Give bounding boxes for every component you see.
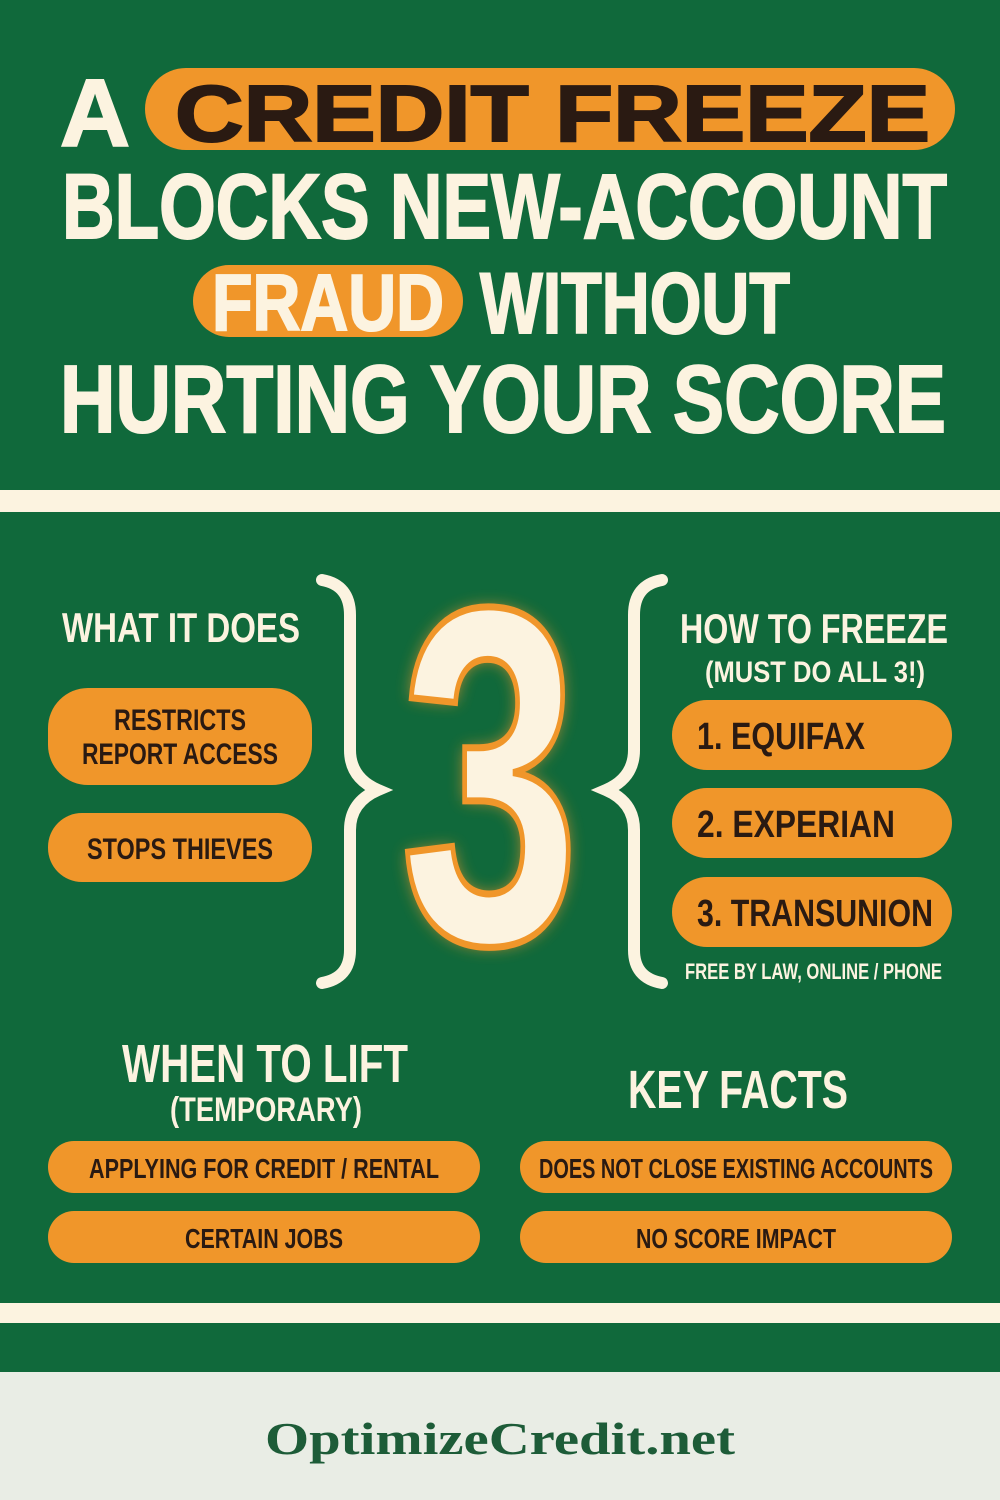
- panel: how to freeze: [672, 605, 952, 984]
- panel: when to lift: APPLYING FOR CREDIT / RENTAL: [89, 1153, 439, 1184]
- panel: how to freeze: (MUST DO ALL 3!): [705, 656, 925, 689]
- panel: what it does: [48, 604, 312, 882]
- panel: key facts: NO SCORE IMPACT: [636, 1223, 836, 1254]
- panel: when to lift: [48, 1034, 480, 1263]
- big number 3: 3: [400, 507, 580, 1044]
- title: WITHOUT: [480, 256, 790, 352]
- panel: when to lift: (TEMPORARY): [170, 1091, 362, 1129]
- brace right: [322, 580, 378, 983]
- panel: how to freeze: 3. TRANSUNION: [697, 893, 933, 935]
- title pill: fraud: [193, 265, 463, 337]
- panel: when to lift: CERTAIN JOBS: [185, 1223, 343, 1254]
- big number 3: 3: [400, 507, 580, 1044]
- panel: key facts: [520, 1060, 952, 1263]
- panel: what it does: REPORT ACCESS: [82, 738, 278, 771]
- panel: key facts: KEY FACTS: [628, 1060, 848, 1120]
- title: [60, 60, 955, 453]
- panel: how to freeze: 1. EQUIFAX: [697, 716, 866, 758]
- panel: what it does: STOPS THIEVES: [87, 833, 273, 866]
- title: A: [60, 60, 130, 167]
- panel: how to freeze: 2. EXPERIAN: [697, 804, 895, 846]
- title pill: credit freeze: [145, 68, 955, 150]
- panel: what it does: WHAT IT DOES: [62, 604, 300, 651]
- panel: when to lift: WHEN TO LIFT: [122, 1034, 408, 1094]
- big number 3: [400, 507, 580, 1044]
- footer: OptimizeCredit.net: [265, 1413, 736, 1464]
- title: CREDIT FREEZE: [175, 69, 930, 158]
- title: FRAUD: [212, 258, 444, 347]
- brace left: [606, 580, 662, 983]
- panel: what it does: RESTRICTS: [114, 704, 246, 737]
- footer: [0, 1372, 1000, 1500]
